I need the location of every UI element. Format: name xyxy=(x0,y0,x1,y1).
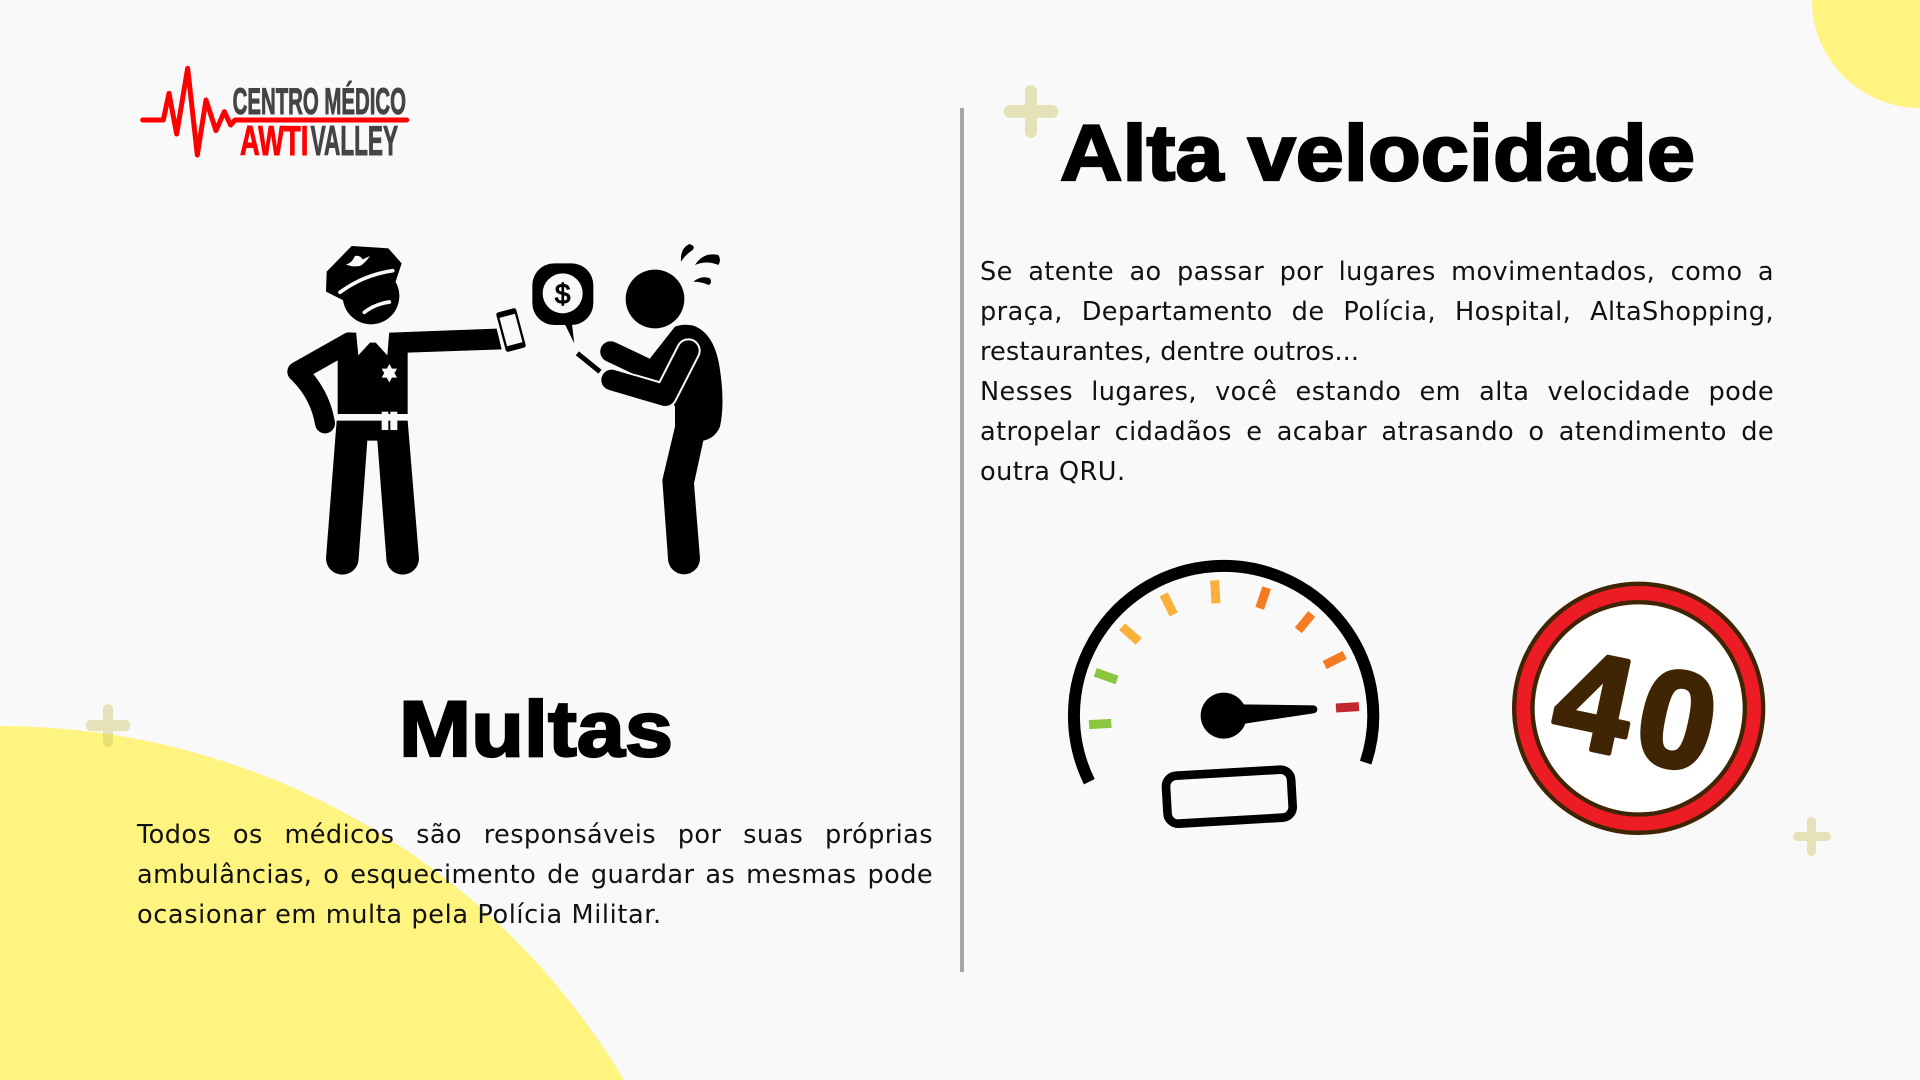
paragraph: Multas: ocasionar em multa pela Polícia Militar. xyxy=(137,900,662,930)
gauge needle xyxy=(1201,693,1317,739)
heading: Multas: Multas xyxy=(399,684,673,773)
gauge ticks xyxy=(1089,580,1359,725)
decorative yellow circle bottom left xyxy=(0,726,624,1080)
speech bubble with dollar sign: $ xyxy=(555,278,571,309)
driver using phone xyxy=(577,244,722,574)
heading: Alta velocidade: Alta velocidade xyxy=(1060,108,1695,197)
paragraph: Alta velocidade: outra QRU. xyxy=(980,457,1126,487)
speedometer icon xyxy=(1074,566,1373,824)
paragraph: Multas: Todos os médicos são responsáveis por suas próprias xyxy=(137,820,933,850)
speed limit sign 40 xyxy=(1512,582,1765,835)
plus decoration top xyxy=(1004,85,1058,138)
gauge arc xyxy=(1074,566,1373,782)
sign number: 40 xyxy=(1541,619,1738,804)
logo text line 2: AWTI xyxy=(240,118,308,164)
gauge display xyxy=(1165,769,1293,824)
paragraph: Alta velocidade: Se atente ao passar por lugares movimentados, como a xyxy=(980,257,1774,287)
logo: Centro Médico Awtivalley xyxy=(143,68,407,164)
officer xyxy=(297,246,502,575)
paragraph: Alta velocidade xyxy=(980,257,1774,487)
logo heartbeat line xyxy=(143,68,407,155)
paragraph: Alta velocidade: atropelar cidadãos e acabar atrasando o atendimento de xyxy=(980,417,1774,447)
decorative yellow circle top right xyxy=(1812,0,1920,108)
speech bubble with dollar sign xyxy=(532,263,593,343)
vertical divider xyxy=(960,108,964,972)
phone held by officer xyxy=(496,308,526,352)
logo text line 1: CENTRO MÉDICO xyxy=(233,81,406,122)
paragraph: Alta velocidade: restaurantes, dentre outros... xyxy=(980,337,1359,367)
paragraph: Alta velocidade: praça, Departamento de Polícia, Hospital, AltaShopping, xyxy=(980,297,1774,327)
illustration: police officer issuing a fine xyxy=(297,244,722,575)
plus decoration right xyxy=(1793,817,1831,856)
paragraph: Multas xyxy=(136,820,933,930)
paragraph: Alta velocidade: Nesses lugares, você estando em alta velocidade pode xyxy=(980,377,1774,407)
paragraph: Multas: ambulâncias, o esquecimento de guardar as mesmas pode xyxy=(137,860,933,890)
plus decoration left xyxy=(86,704,130,747)
logo text line 2: VALLEY xyxy=(311,118,398,164)
